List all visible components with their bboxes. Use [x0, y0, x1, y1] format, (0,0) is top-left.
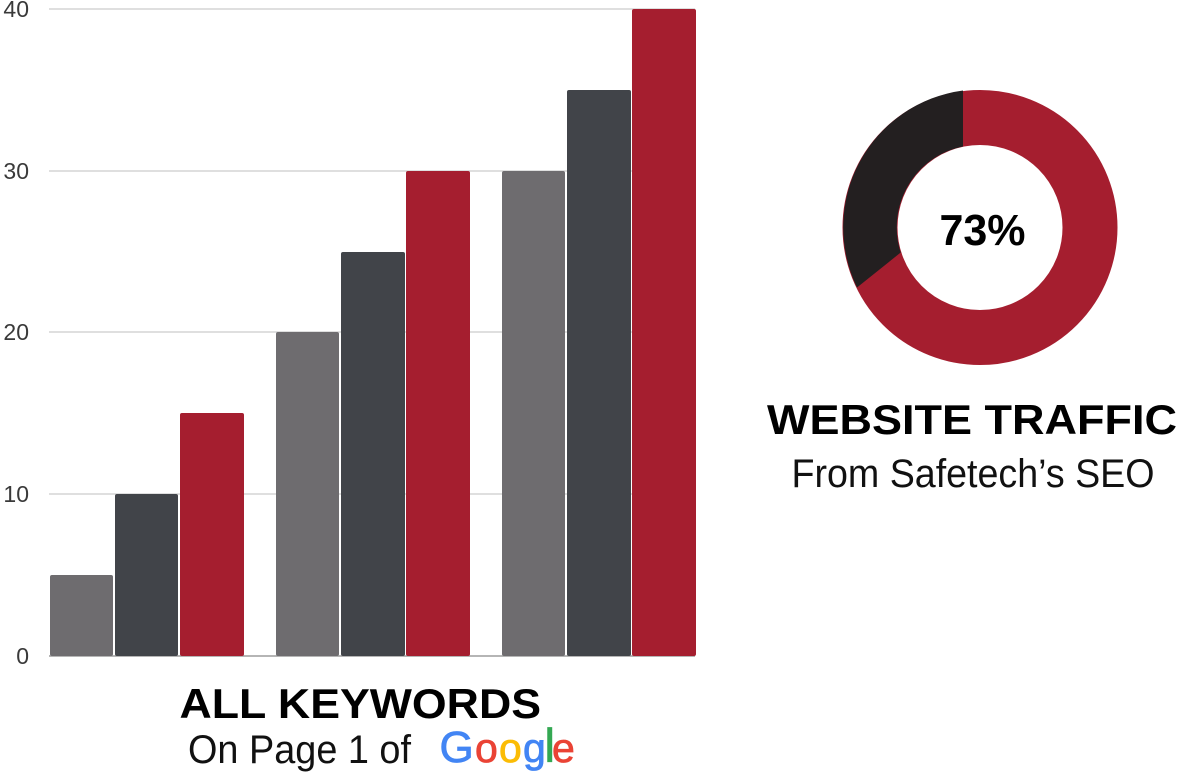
bar group 2 [276, 171, 470, 656]
logo: google: e [552, 725, 575, 771]
logo: google: o [475, 725, 498, 771]
y axis labels: 0 [16, 643, 29, 669]
heading: all keywords: ALL KEYWORDS [180, 680, 541, 727]
heading: website traffic: WEBSITE TRAFFIC [767, 396, 1177, 443]
y axis labels: 20 [3, 319, 29, 345]
logo: google: l [544, 719, 555, 772]
bar group 1 [50, 413, 244, 656]
bar chart: all keywords [3, 0, 696, 669]
y axis labels: 10 [3, 481, 29, 507]
bar group 3 [502, 9, 696, 656]
subheading: on page 1 of: On Page 1 of [188, 728, 412, 772]
subheading: from safetech's seo: From Safetech’s SEO [792, 452, 1154, 496]
logo: google: G [440, 723, 474, 772]
donut value: 73% [940, 206, 1026, 255]
logo: google: g [523, 725, 546, 771]
y axis labels: 30 [3, 158, 29, 184]
donut chart: website traffic [843, 90, 1090, 338]
y axis labels [3, 0, 29, 669]
logo: google [440, 719, 575, 772]
logo: google: o [499, 725, 522, 771]
